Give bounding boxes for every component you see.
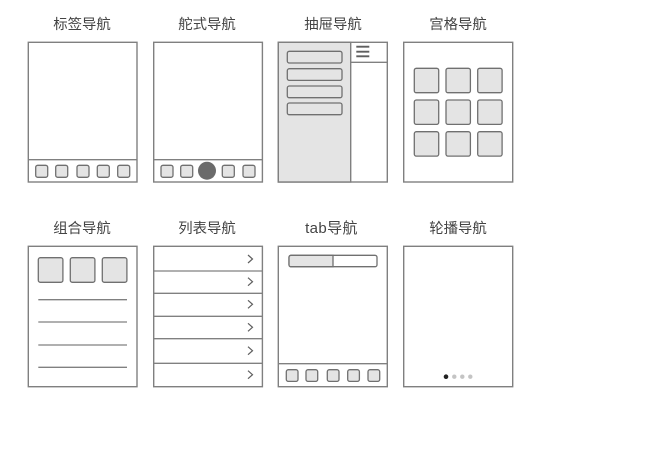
panel: 宫格导航	[404, 16, 513, 182]
phone frame	[278, 42, 387, 182]
panel: 抽屉导航	[278, 16, 387, 182]
panel: 舵式导航	[154, 16, 262, 182]
heading: 标签导航: 标签导航	[53, 16, 111, 33]
heading: 列表导航: 列表导航	[178, 220, 236, 237]
phone frame	[28, 42, 137, 182]
heading: 抽屉导航: 抽屉导航	[304, 16, 362, 33]
panel: 轮播导航	[404, 220, 513, 387]
phone frame	[154, 246, 262, 387]
list lines	[38, 300, 127, 367]
bottom tab bar	[28, 160, 137, 177]
heading: 轮播导航: 轮播导航	[429, 220, 487, 237]
phone frame	[28, 246, 137, 387]
bottom tab bar	[278, 364, 387, 381]
header with menu icon	[351, 47, 387, 62]
panel: tab导航	[278, 220, 387, 387]
list rows	[154, 271, 262, 363]
heading: 组合导航: 组合导航	[53, 220, 111, 237]
icon grid	[414, 68, 502, 156]
panel: 列表导航	[154, 220, 262, 387]
segmented tab control	[289, 255, 377, 267]
phone frame	[154, 42, 262, 182]
chevrons	[248, 255, 252, 379]
heading: tab导航: tab导航	[305, 220, 358, 237]
panel: 组合导航	[28, 220, 137, 387]
phone frame	[404, 246, 513, 387]
panel: 标签导航	[28, 16, 137, 182]
phone frame	[278, 246, 387, 387]
heading: 舵式导航: 舵式导航	[178, 16, 236, 33]
heading: 宫格导航: 宫格导航	[429, 16, 487, 33]
icon row	[38, 258, 127, 282]
phone frame	[404, 42, 513, 182]
drawer	[278, 42, 351, 182]
carousel dots	[444, 374, 472, 379]
bottom bar with centre button	[154, 160, 262, 180]
